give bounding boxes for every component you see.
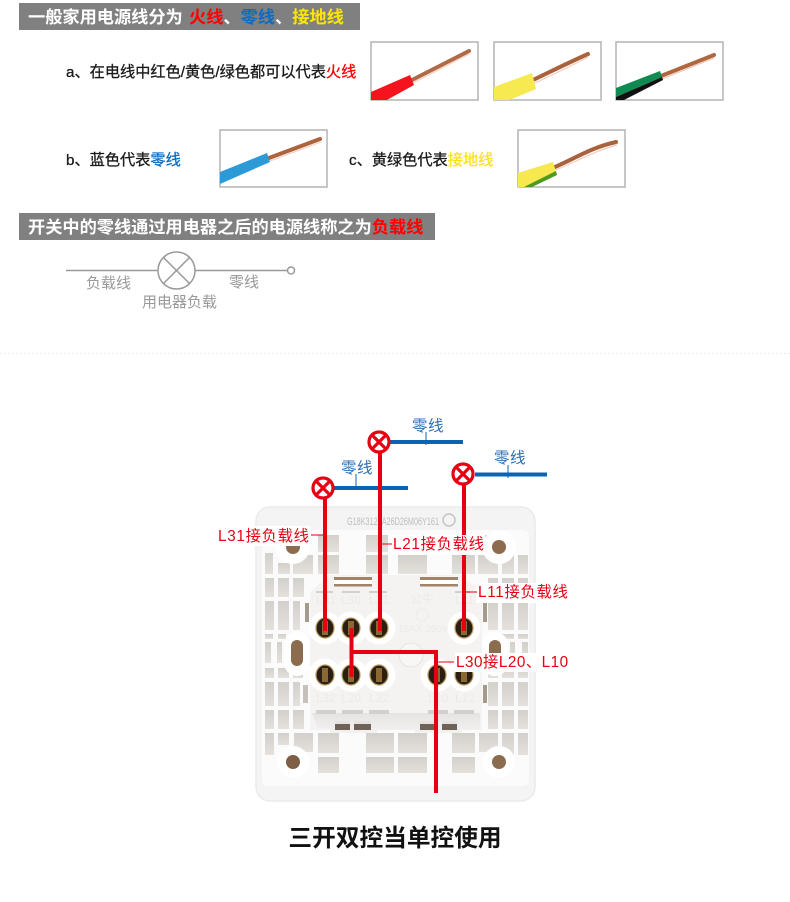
heading: three wire types: 一般家用电源线分为 (28, 7, 183, 27)
panel windows (265, 535, 528, 773)
photo: red wire (371, 42, 478, 101)
heading: load wire definition: 开关中的零线通过用电器之后的电源线称之为负载线 (28, 217, 423, 237)
faint moulded labels: L32 (316, 691, 336, 705)
faint moulded labels (316, 591, 475, 705)
text: option c: c、黄绿色代表接地线 (349, 152, 493, 169)
photo: yellow wire (494, 42, 601, 101)
heading: three wire types: 、零线、接地线 (223, 7, 344, 27)
label: neutral wire middle: 零线 (412, 417, 444, 435)
faint moulded labels: 16AX 250V (398, 624, 449, 635)
center logo (399, 643, 423, 667)
lamp symbols (313, 432, 473, 498)
label: L31: L31接负载线 (218, 528, 310, 545)
label: L11: L11接负载线 (478, 584, 568, 601)
module tabs and side clips (303, 591, 487, 714)
text: option a: a、在电线中红色/黄色/绿色都可以代表火线 (66, 64, 356, 81)
faint moulded labels: L20 (341, 691, 361, 705)
diagram: load circuit symbol: 用电器负载 (142, 294, 217, 311)
photo: switch back panel (256, 507, 535, 801)
faint moulded labels: L21 (369, 593, 389, 607)
diagram: load circuit symbol: 负载线 (86, 275, 131, 292)
label: neutral wire right: 零线 (494, 449, 526, 467)
photo: blue wire (220, 130, 327, 187)
faint moulded labels: 公牛 (410, 591, 434, 606)
faint moulded labels: L11 (455, 593, 474, 607)
label: L21: L21接负载线 (393, 536, 485, 553)
switch slots (334, 577, 458, 730)
heading: three wire types: 火线 (189, 7, 223, 27)
faint moulded labels: L10 (428, 691, 448, 705)
faint moulded labels: L30 (341, 593, 361, 607)
faint moulded labels: L22 (369, 691, 389, 705)
neutral wires (334, 432, 547, 488)
certification mark (443, 514, 455, 526)
text: option b: b、蓝色代表零线 (66, 152, 181, 169)
photo: yellow-green wire (518, 130, 625, 188)
terminals (308, 612, 480, 692)
screw holes (276, 530, 516, 778)
heading: three wire types (19, 3, 360, 30)
label: neutral wire left: 零线 (341, 459, 373, 477)
diagram: load circuit symbol (66, 252, 294, 311)
red load wires (325, 452, 464, 793)
photo: green wire (616, 42, 723, 101)
caption: 三开双控当单控使用 (288, 825, 502, 852)
center module (310, 575, 482, 733)
diagram: load circuit symbol: 零线 (229, 274, 259, 291)
serial number: G18K3121A26D26M06Y161 (347, 516, 439, 528)
faint moulded labels: L31 (316, 593, 336, 607)
label: L30: L30接L20、L10 (456, 654, 569, 671)
faint moulded labels: L12 (455, 691, 475, 705)
